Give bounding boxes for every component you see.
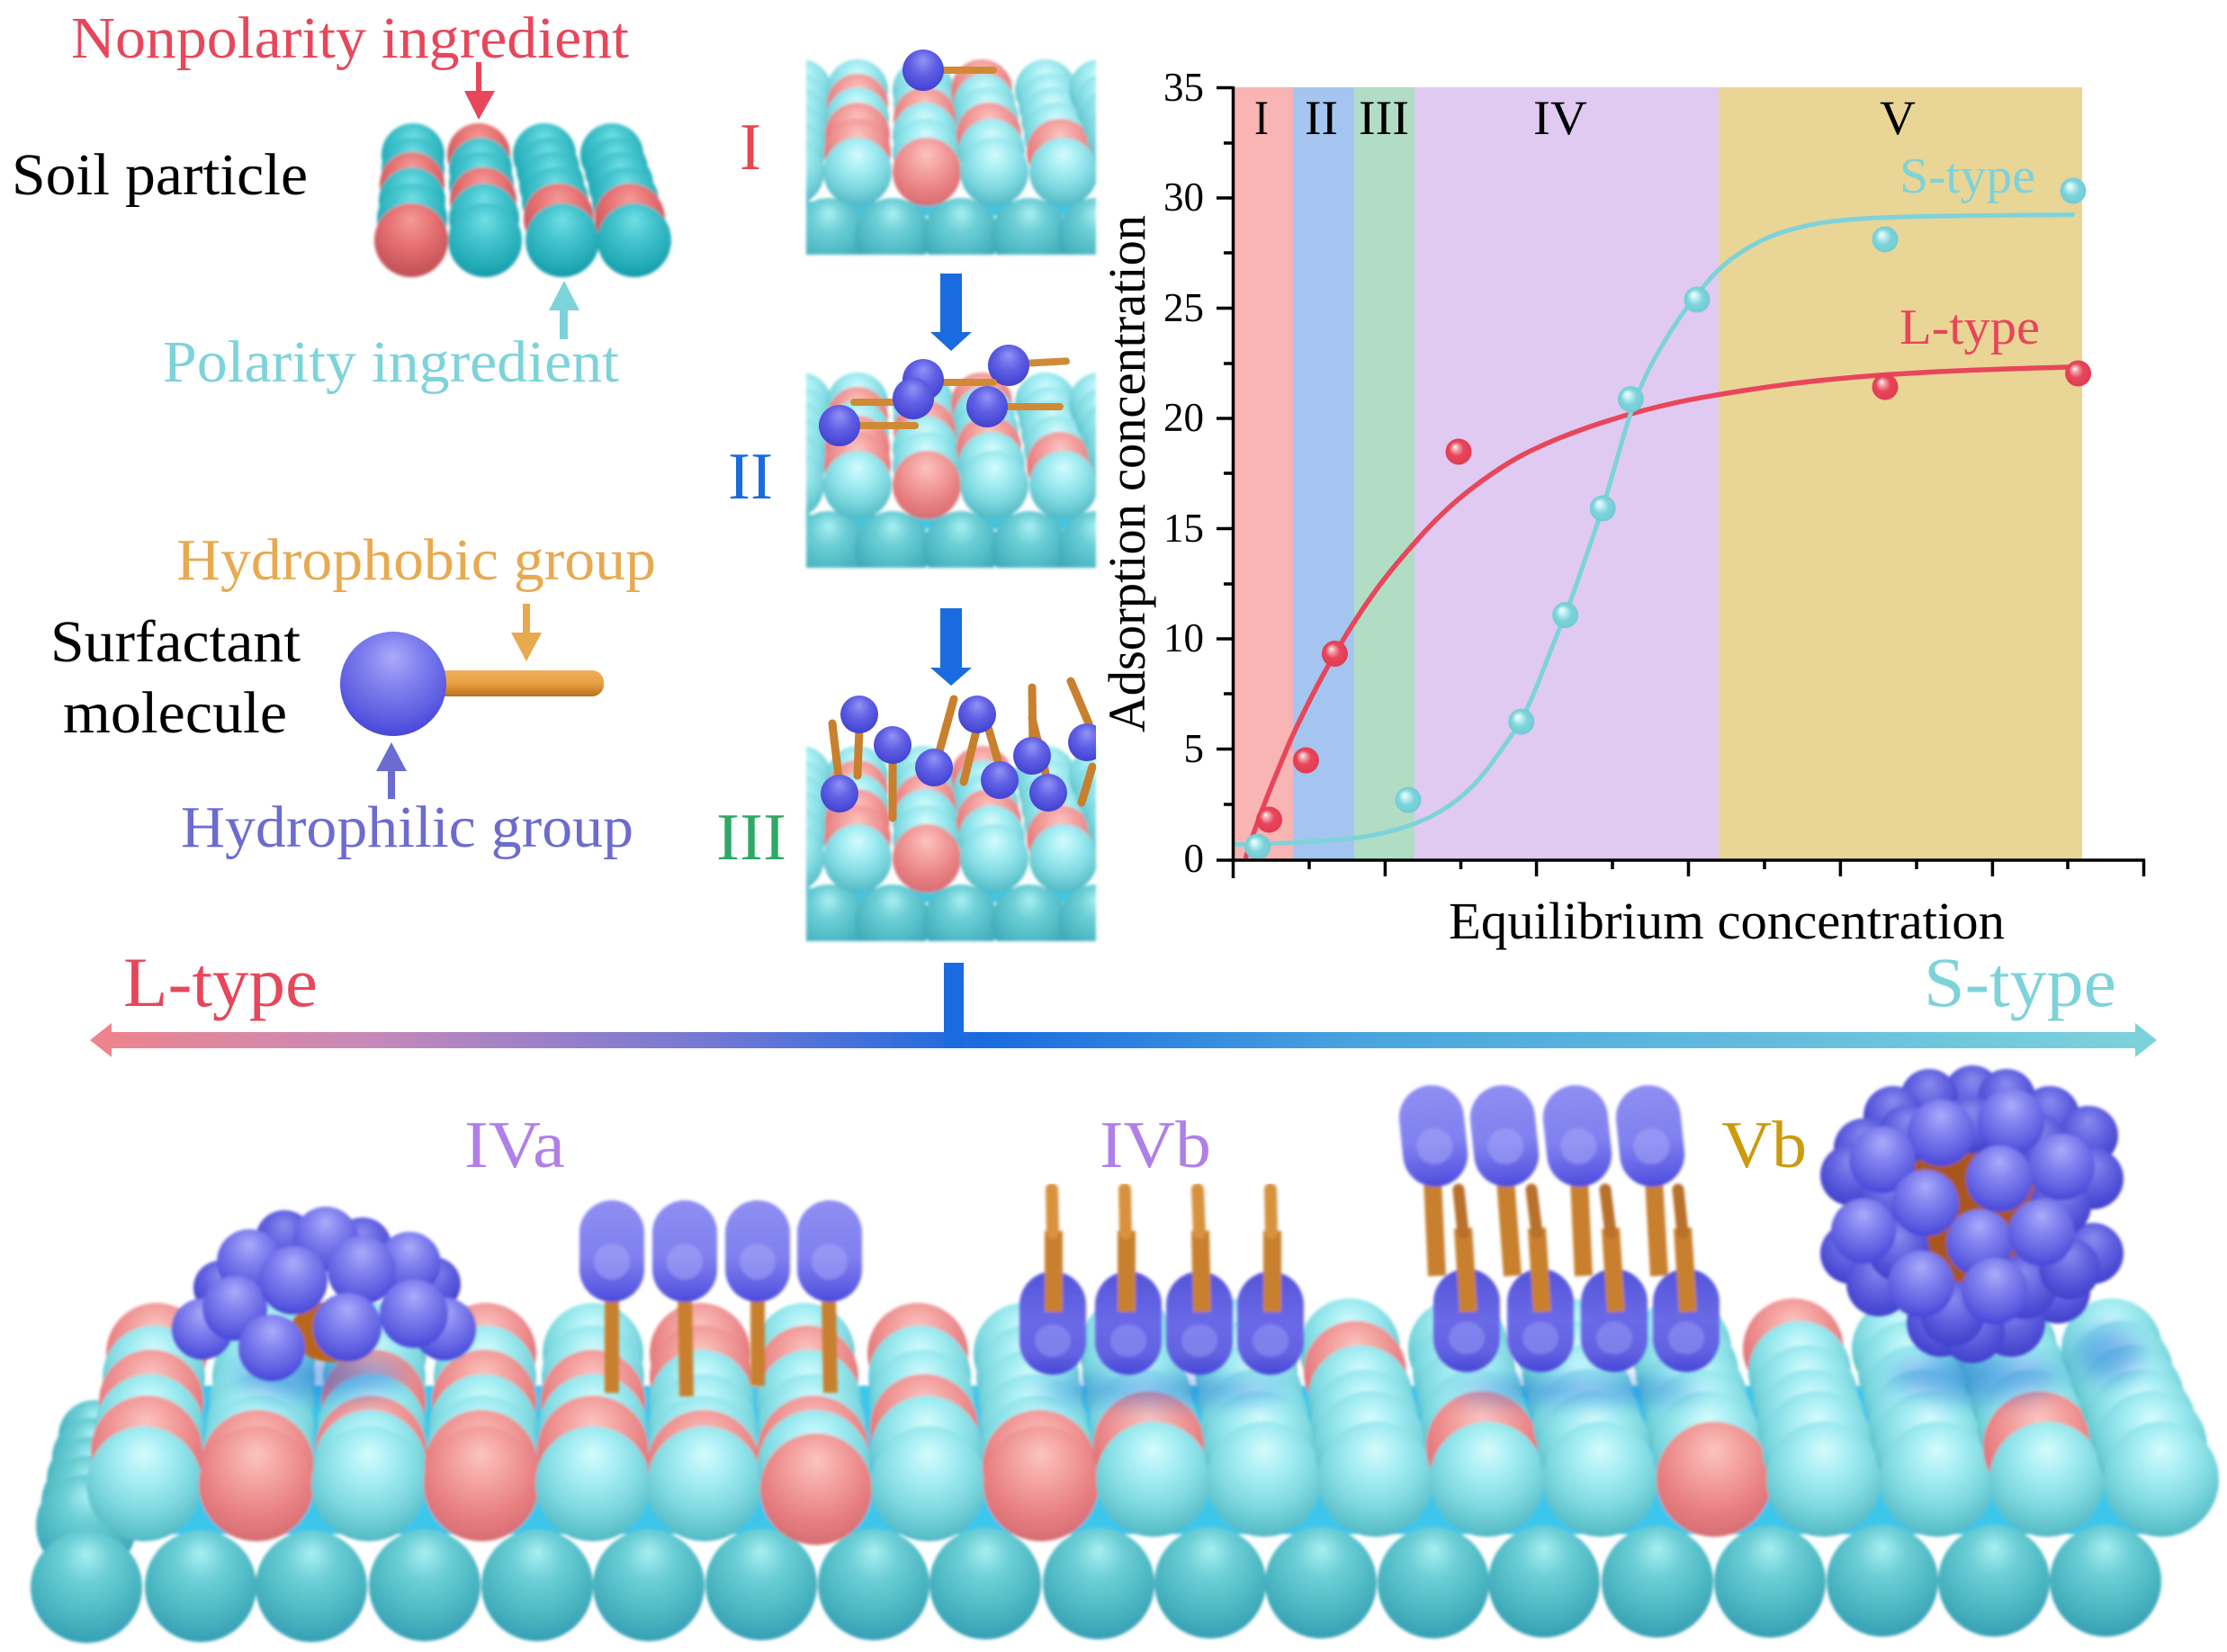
arrow: I to II (930, 274, 972, 351)
heading: nonpolarity ingredient: Nonpolarity ingredient (71, 5, 629, 71)
label: soil particle: Soil particle (12, 142, 308, 208)
molecules lying flat (819, 345, 1070, 446)
label: surfactant molecule: molecule (63, 680, 287, 746)
region labels: I (1254, 91, 1269, 145)
label: surfactant molecule (50, 609, 301, 746)
label: L-type: L-type (123, 943, 318, 1021)
series label S-type: S-type (1899, 148, 2035, 204)
region labels: II (1305, 91, 1338, 145)
S-type curve (1235, 215, 2075, 845)
molecules: bilayer (1396, 1082, 1720, 1372)
label: IVb: IVb (1100, 1109, 1211, 1182)
y axis title: Adsorption concentration (1098, 215, 1156, 732)
molecules: IVb upright, heads down (1019, 1190, 1304, 1375)
region labels: IV (1533, 91, 1587, 145)
y tick numbers: 0 (1184, 836, 1204, 881)
y tick numbers: 30 (1163, 175, 1204, 220)
left back column (36, 1400, 137, 1576)
y tick numbers: 5 (1184, 726, 1204, 771)
stage label I: I (740, 111, 761, 184)
soil surface (31, 1298, 2219, 1643)
y tick numbers: 15 (1163, 506, 1204, 551)
micelle cluster: IVa hemimicelle (172, 1207, 476, 1381)
axes (1217, 86, 2145, 878)
icon: soil particle (374, 123, 671, 277)
panel: stage II (723, 345, 1167, 587)
micelle cluster: Vb spherical (1820, 1065, 2124, 1363)
arrow: nonpolarity (464, 62, 495, 120)
region labels (1254, 91, 1916, 145)
icon: surfactant molecule (340, 632, 604, 736)
arrow: II to III (930, 608, 972, 686)
region labels: III (1359, 91, 1409, 145)
label: polarity ingredient: Polarity ingredient (163, 329, 619, 395)
label: surfactant molecule: Surfactant (50, 609, 301, 675)
series label L-type: L-type (1899, 300, 2040, 355)
y tick numbers: 25 (1163, 285, 1204, 330)
arrow: polarity (549, 281, 579, 339)
y tick numbers: 20 (1163, 395, 1204, 440)
bottom row of spheres (31, 1525, 2161, 1643)
upper layer columns, right half (1079, 1298, 2219, 1537)
y tick numbers (1163, 65, 1204, 881)
label: Vb: Vb (1721, 1109, 1807, 1182)
arrow: hydrophilic (376, 742, 407, 799)
panel: stage I (723, 49, 1167, 274)
panel: stage III (804, 677, 1098, 944)
L-type curve (1245, 367, 2079, 858)
S-type data points (1244, 178, 2086, 860)
molecules standing up (821, 681, 1106, 818)
label: hydrophilic group: Hydrophilic group (181, 795, 633, 860)
label: hydrophobic group: Hydrophobic group (176, 527, 656, 593)
chart: adsorption isotherms (1098, 65, 2145, 950)
region bands (1235, 87, 2082, 859)
x axis title: Equilibrium concentration (1449, 892, 2005, 950)
arrow: hydrophobic (511, 604, 542, 661)
stage label II: II (728, 440, 773, 514)
stage label III: III (716, 801, 786, 875)
upper layer columns, left half (86, 1303, 1099, 1545)
region labels: V (1880, 91, 1916, 145)
double arrow: L-type to S-type (90, 1023, 2157, 1057)
molecule on surface (902, 49, 997, 91)
contact shadows (234, 1327, 2142, 1403)
connector bar from stage III (944, 963, 964, 1048)
molecules: IVa upright, heads up (579, 1200, 862, 1396)
label: IVa: IVa (464, 1109, 565, 1182)
L-type data points (1256, 360, 2091, 833)
label: S-type: S-type (1924, 943, 2116, 1021)
y tick numbers: 10 (1163, 615, 1204, 660)
y tick numbers: 35 (1163, 65, 1204, 110)
